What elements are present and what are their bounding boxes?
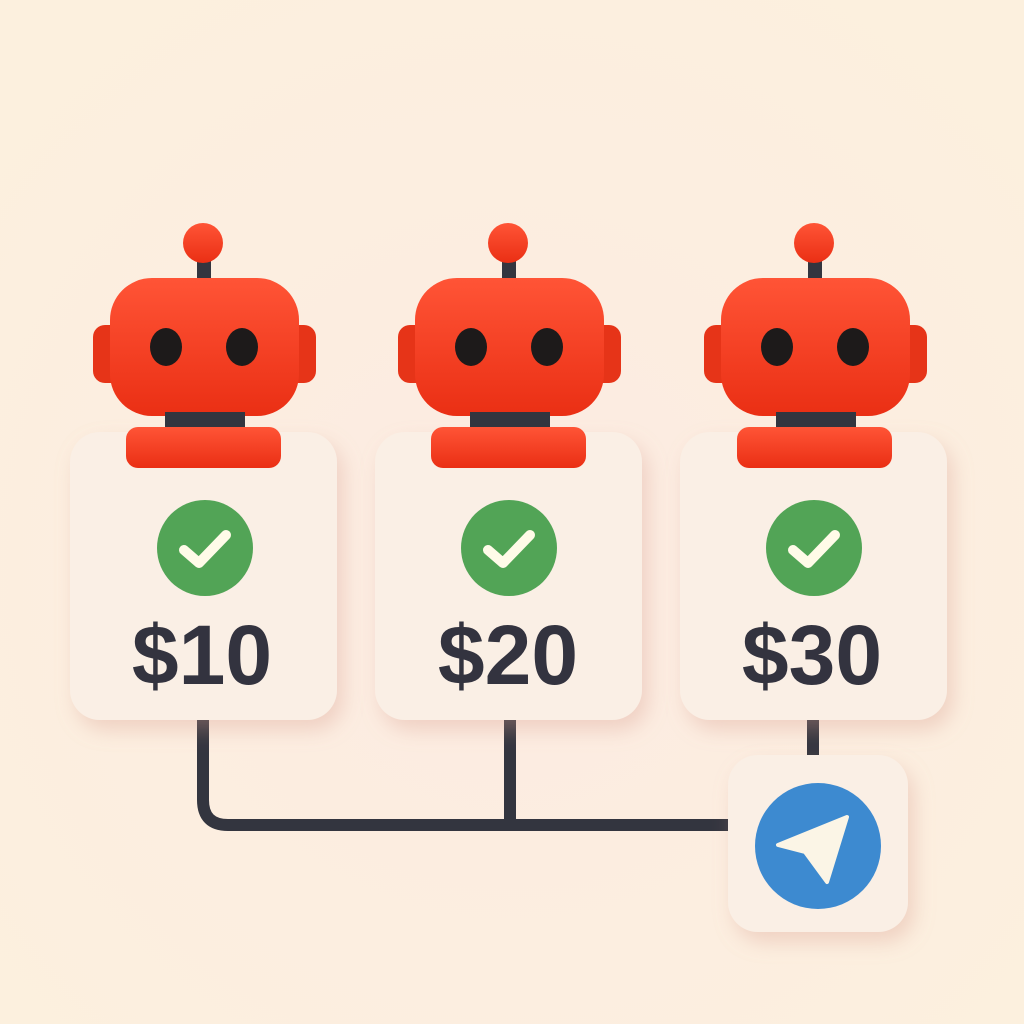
price 3: $30	[742, 608, 882, 702]
icon: robot 3	[704, 223, 927, 468]
icon: telegram box	[728, 755, 908, 932]
price 1: $10	[132, 608, 272, 702]
connector lines	[203, 718, 813, 825]
icon: check 1	[157, 500, 253, 596]
icon: check 2	[461, 500, 557, 596]
icon: check 3	[766, 500, 862, 596]
panel: $10	[70, 223, 337, 720]
icon: robot 1	[93, 223, 316, 468]
price 2: $20	[438, 608, 578, 702]
panel: $30	[680, 223, 947, 720]
panel: $20	[375, 223, 642, 720]
icon: robot 2	[398, 223, 621, 468]
